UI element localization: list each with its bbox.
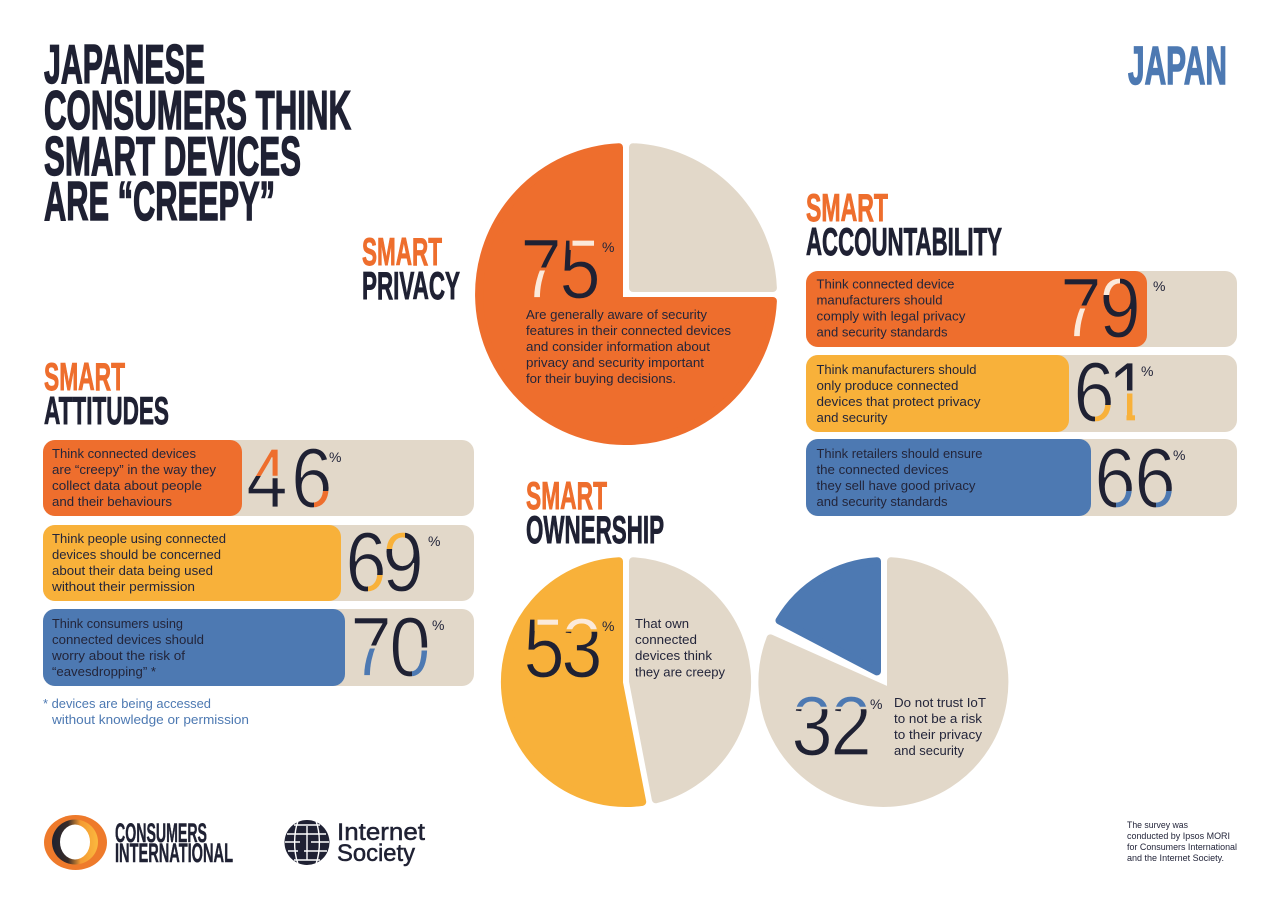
bar: 70 percent: %	[432, 617, 444, 633]
icon: Internet Society globe	[284, 820, 330, 865]
bar: 79 percent: 79	[1060, 261, 1141, 355]
number: 75 percent: %	[602, 239, 614, 255]
text: own connected devices: they are creepy	[635, 664, 725, 680]
bar: 66 percent: and security standards	[816, 494, 948, 509]
text: survey source: for Consumers International	[1127, 842, 1237, 852]
text: own connected devices: devices think	[635, 648, 713, 663]
bar: 46 percent: are “creepy” in the way they	[52, 462, 217, 477]
number: 53 percent	[526, 618, 614, 678]
bar: 69 percent: 69	[345, 515, 424, 609]
heading: smart attitudes	[44, 356, 169, 433]
number: 53 percent: 53	[524, 601, 603, 695]
bar: 66 percent: the connected devices	[816, 462, 949, 477]
text: do not trust IoT: Do not trust IoT	[894, 695, 986, 710]
text: privacy description: and consider information about	[526, 339, 710, 354]
bar: 70 percent	[43, 609, 474, 686]
bar: 66 percent: Think retailers should ensure	[816, 446, 982, 461]
bar: 79 percent	[806, 271, 1237, 347]
title: SMART DEVICES	[44, 125, 301, 187]
bar: 79 percent: Think connected device	[816, 276, 954, 292]
bar: 70 percent: connected devices should	[52, 632, 204, 647]
icon: Consumers International ring	[44, 815, 107, 870]
footnote: * devices are being accessed	[43, 696, 211, 711]
bar: 46 percent	[43, 440, 474, 516]
text: do not trust IoT: and security	[894, 743, 964, 758]
heading: smart accountability: ACCOUNTABILITY	[806, 221, 1002, 264]
heading: smart privacy: PRIVACY	[362, 265, 460, 308]
number: 53 percent: %	[602, 618, 614, 634]
bar: 79 percent: 79	[1060, 261, 1141, 355]
panel: smart attitudes	[43, 356, 474, 727]
bar: 46 percent: %	[329, 449, 341, 465]
bar: 70 percent: 70	[351, 600, 431, 694]
bar: 46 percent: and their behaviours	[52, 494, 172, 509]
bar: 69 percent: %	[428, 533, 440, 549]
bar: 66 percent: 66	[1094, 431, 1176, 525]
bar: 61 percent: devices that protect privacy	[816, 394, 981, 409]
number: 32 percent: %	[870, 696, 882, 712]
bar: 61 percent: Think manufacturers should	[816, 362, 976, 377]
text: privacy description: Are generally aware of security	[526, 307, 707, 322]
text: privacy description	[526, 307, 732, 386]
number: 75 percent	[524, 240, 614, 298]
number: 32 percent: 32	[791, 679, 872, 773]
bar: 61 percent	[806, 355, 1237, 432]
text: survey source: The survey was	[1127, 820, 1188, 830]
pie chart: 75 percent	[479, 147, 773, 441]
bar: 69 percent: Think people using connected	[52, 531, 226, 546]
heading: smart privacy	[362, 231, 460, 308]
logo: Internet Society: Society	[337, 840, 415, 867]
bar: 70 percent: worry about the risk of	[51, 648, 185, 663]
text: do not trust IoT: to not be a risk	[894, 711, 983, 726]
number: 32 percent	[794, 696, 882, 756]
logo: Consumers International: CONSUMERS	[115, 818, 207, 848]
bar: 61 percent: %	[1141, 363, 1153, 379]
text: do not trust IoT	[894, 695, 986, 758]
heading: smart accountability: SMART	[806, 187, 888, 230]
bar: 79 percent: manufacturers should	[816, 292, 942, 308]
heading: smart ownership: SMART	[526, 475, 607, 518]
title: ARE “CREEPY”	[44, 170, 275, 232]
bar: 61 percent: and security	[816, 410, 888, 425]
text: own connected devices	[635, 616, 725, 680]
bar: 46 percent: 46	[246, 431, 332, 525]
number: 75 percent: 75	[521, 222, 601, 316]
bar: 66 percent	[806, 439, 1237, 516]
bar: 69 percent	[43, 525, 474, 601]
bar: 66 percent: %	[1173, 447, 1185, 463]
text: survey source	[1127, 820, 1237, 863]
bar: 61 percent: 61	[1074, 345, 1149, 439]
bar: 61 percent: only produce connected	[816, 378, 958, 393]
text: privacy description: privacy and security important	[526, 355, 704, 370]
text: privacy description: features in their connected devices	[526, 323, 732, 338]
text: do not trust IoT: to their privacy	[894, 727, 983, 742]
bar: 66 percent: they sell have good privacy	[816, 478, 976, 493]
bar: 46 percent: Think connected devices	[52, 446, 196, 461]
pie chart: 53 percent	[505, 561, 747, 803]
bar: 46 percent: 46	[246, 431, 332, 525]
bar: 79 percent: and security standards	[816, 324, 948, 340]
title	[44, 33, 351, 232]
title: CONSUMERS THINK	[44, 79, 351, 141]
logo: Internet Society	[284, 819, 425, 867]
number: 75 percent: 75	[521, 222, 601, 316]
bar: 46 percent: collect data about people	[52, 478, 202, 493]
number: 53 percent: 53	[524, 601, 603, 695]
panel: smart ownership	[505, 475, 1004, 803]
bar: 70 percent: “eavesdropping” *	[52, 664, 156, 679]
bar: 66 percent: 66	[1094, 431, 1176, 525]
text: survey source: conducted by Ipsos MORI	[1127, 831, 1230, 841]
bar: 79 percent: %	[1153, 278, 1165, 294]
panel: smart accountability	[806, 187, 1237, 525]
text: own connected devices: connected	[635, 632, 697, 647]
logo: Internet Society: Internet	[337, 819, 425, 846]
bar: 69 percent: about their data being used	[52, 563, 213, 578]
footnote	[43, 696, 249, 727]
heading: smart accountability	[806, 187, 1002, 264]
pie chart: 32 percent	[762, 561, 1004, 803]
bar: 69 percent: devices should be concerned	[52, 547, 221, 562]
logo: Consumers International	[44, 815, 233, 870]
heading: smart ownership: OWNERSHIP	[526, 509, 664, 552]
text: survey source: and the Internet Society.	[1127, 853, 1224, 863]
title: JAPANESE	[44, 33, 205, 95]
bar: 69 percent: 69	[345, 515, 424, 609]
footnote: without knowledge or permission	[51, 712, 249, 727]
text: privacy description: for their buying decisions.	[526, 371, 676, 386]
heading: smart privacy: SMART	[362, 231, 442, 274]
panel: smart privacy	[362, 147, 773, 441]
heading: smart attitudes: ATTITUDES	[44, 390, 169, 433]
bar: 79 percent: comply with legal privacy	[816, 308, 966, 324]
bar: 69 percent: without their permission	[51, 579, 195, 594]
logo: Consumers International: INTERNATIONAL	[115, 838, 233, 868]
heading: smart ownership	[526, 475, 664, 552]
bar: 70 percent: 70	[351, 600, 431, 694]
bar: 70 percent: Think consumers using	[52, 616, 183, 631]
heading: smart attitudes: SMART	[44, 356, 125, 399]
number: 32 percent: 32	[791, 679, 872, 773]
bar: 61 percent: 61	[1074, 345, 1149, 439]
text: own connected devices: That own	[635, 616, 689, 631]
